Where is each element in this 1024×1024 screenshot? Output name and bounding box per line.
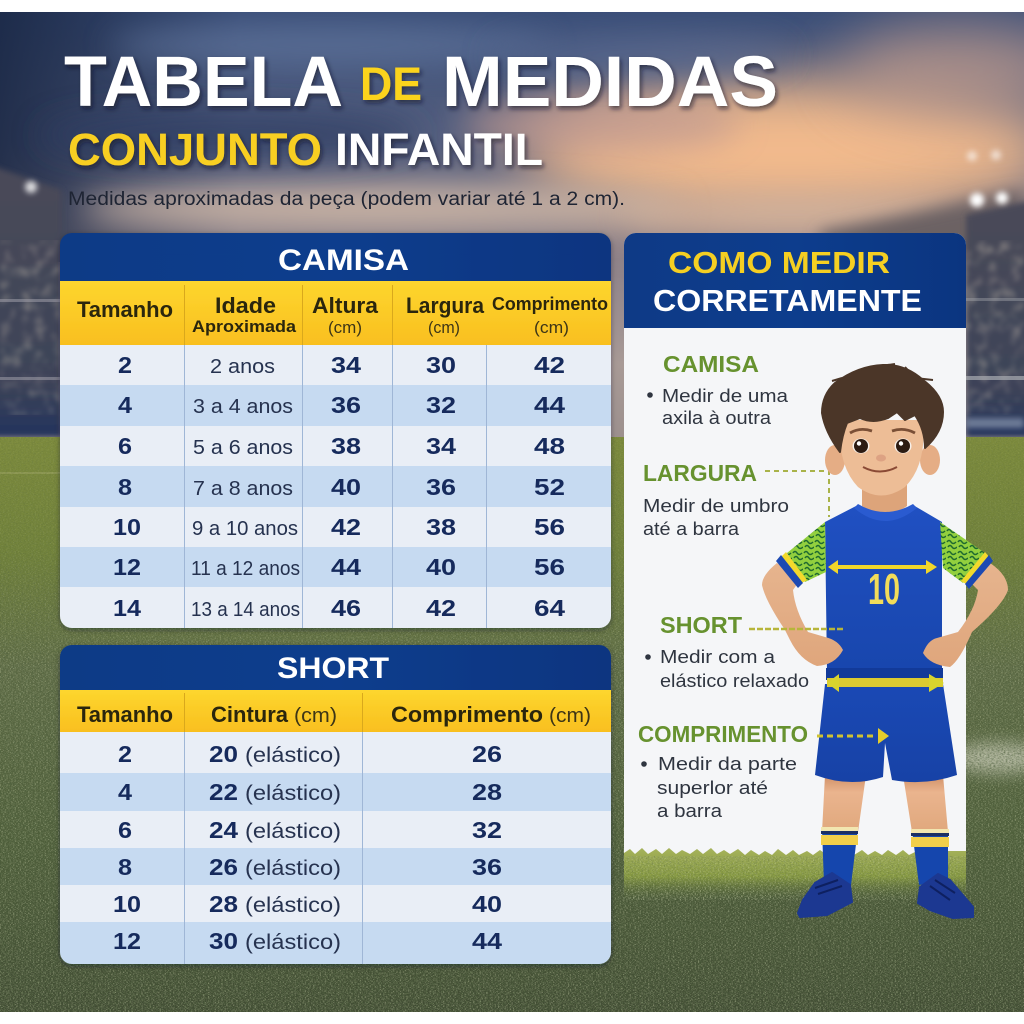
instruction: comprimento: a barra [657,801,723,821]
row: tamanho 14: 64 [534,595,565,621]
row: tamanho 12 [113,928,502,954]
row: tamanho 10: 10 [113,514,141,540]
row: tamanho 12 [113,554,565,580]
row: tamanho 14 [113,595,565,621]
row: tamanho 8: 40 [331,474,361,500]
instruction: comprimento: Medir da parte [658,754,797,774]
subtitle: conjunto infantil: INFANTIL [335,124,543,175]
row: tamanho 6: 38 [331,433,361,459]
row: tamanho 10: 40 [472,891,502,917]
row: tamanho 12: 40 [426,554,456,580]
length arrow [817,728,889,744]
instruction: camisa: CAMISA [663,351,759,377]
row: tamanho 4: 3 a 4 anos [193,396,293,418]
row: tamanho 8: 52 [534,474,565,500]
column headers: Comprimento [391,702,543,727]
waist arrow [827,674,944,692]
row: tamanho 14: 46 [331,595,361,621]
column headers: Aproximada [192,317,297,336]
column headers: (cm) [428,318,460,337]
row: tamanho 8: 36 [472,854,502,880]
row: tamanho 8 [118,474,565,500]
shorts [815,684,957,782]
row: tamanho 12: (elástico) [245,931,341,954]
illustration: boy in kit [749,364,1008,918]
instruction: comprimento [638,721,808,821]
row: tamanho 2 [118,352,565,378]
instruction: short: Medir com a [660,647,776,667]
shirt number: 10 [868,565,900,614]
short pointer [749,628,843,630]
legs [822,775,948,832]
row: tamanho 12: 11 a 12 anos [191,558,300,580]
note: Medidas aproximadas da peça (podem variar até 1 a 2 cm). [68,189,625,210]
row: tamanho 2: 20 [209,741,238,767]
row: tamanho 6: 32 [472,817,502,843]
row: tamanho 4: 4 [118,392,132,418]
row: tamanho 10: 10 [113,891,141,917]
subtitle: conjunto infantil [68,124,543,175]
row: tamanho 6: 48 [534,433,565,459]
column headers [77,702,591,727]
row: tamanho 8: 7 a 8 anos [193,478,293,500]
row: tamanho 4 [118,392,565,418]
column headers: Largura [406,293,485,318]
panel: camisa table [60,233,611,628]
row: tamanho 6 [118,817,502,843]
row: tamanho 4: 28 [472,779,502,805]
subtitle: conjunto infantil: CONJUNTO [68,124,322,175]
eyes and brows [850,429,915,454]
row: tamanho 4: 22 [209,779,238,805]
instruction: camisa: Medir de uma [662,386,789,406]
instruction: largura [643,460,829,539]
row: tamanho 2: (elástico) [245,744,341,767]
row: tamanho 10 [113,891,502,917]
row: tamanho 14: 13 a 14 anos [191,599,300,621]
row: tamanho 12: 44 [472,928,502,954]
instruction: short [645,612,809,691]
instruction: camisa [647,351,789,428]
heading: camisa: CAMISA [278,244,409,277]
hair [822,365,943,452]
row: tamanho 6: 6 [118,433,132,459]
row: tamanho 12: 44 [331,554,361,580]
row: tamanho 8: 8 [118,474,132,500]
row: tamanho 8: 36 [426,474,456,500]
title: DE [360,57,422,110]
column headers: Comprimento [492,294,608,314]
row: tamanho 12: 30 [209,928,238,954]
row: tamanho 4: (elástico) [245,782,341,805]
instruction: largura: Medir de umbro [643,496,789,516]
row: tamanho 4: 44 [534,392,565,418]
instruction: short: SHORT [660,612,742,638]
heading: como medir: COMO MEDIR [668,245,890,280]
row: tamanho 2: 2 [118,352,132,378]
row: tamanho 2: 2 anos [210,356,275,378]
nose and smile [863,454,897,472]
row: tamanho 12: 56 [534,554,565,580]
row: tamanho 4: 32 [426,392,456,418]
instruction: camisa: axila à outra [662,408,772,428]
shirt [825,505,942,672]
heading: corretamente: CORRETAMENTE [653,283,922,318]
instruction: largura: até a barra [643,519,740,539]
column headers: (cm) [328,318,362,337]
row: tamanho 10: 56 [534,514,565,540]
row: tamanho 6: 34 [426,433,456,459]
column headers [77,293,608,337]
row: tamanho 4: 36 [331,392,361,418]
title: MEDIDAS [442,43,778,122]
column headers: Tamanho [77,297,173,322]
row: tamanho 2 [118,741,502,767]
column headers: Idade [215,293,276,318]
row: tamanho 10: 28 [209,891,238,917]
arms [762,563,1008,667]
title [64,43,778,122]
row: tamanho 2: 30 [426,352,456,378]
row: tamanho 8: 26 [209,854,238,880]
row: tamanho 12: 12 [113,928,141,954]
column headers: (cm) [549,705,591,727]
ears [825,445,940,475]
column headers: Tamanho [77,702,173,727]
hair tufts [832,364,933,381]
row: tamanho 10: 9 a 10 anos [192,518,298,540]
column headers: (cm) [294,705,337,727]
row: tamanho 10: 38 [426,514,456,540]
row: tamanho 2: 42 [534,352,565,378]
heading: short: SHORT [277,652,389,685]
panel: como medir corretamente [624,233,966,900]
title: TABELA [64,43,343,122]
row: tamanho 10: (elástico) [245,894,341,917]
instruction: comprimento: COMPRIMENTO [638,721,808,747]
panel: short table [60,645,611,964]
column headers: Altura [312,293,379,318]
row: tamanho 6: 5 a 6 anos [193,437,293,459]
socks [821,827,949,885]
neck [862,485,907,514]
chest arrow [828,560,937,574]
row: tamanho 6: 24 [209,817,238,843]
row: tamanho 14: 14 [113,595,141,621]
row: tamanho 8 [118,854,502,880]
row: tamanho 14: 42 [426,595,456,621]
row: tamanho 2: 26 [472,741,502,767]
row: tamanho 6: 6 [118,817,132,843]
sleeves [776,522,993,589]
face [840,420,924,496]
collar [854,504,917,521]
instruction: comprimento: superlor até [657,778,768,798]
row: tamanho 6 [118,433,565,459]
instruction: short: elástico relaxado [660,671,809,691]
row: tamanho 10 [113,514,565,540]
row: tamanho 6: (elástico) [245,820,341,843]
row: tamanho 2: 34 [331,352,361,378]
row: tamanho 4: 4 [118,779,132,805]
row: tamanho 10: 42 [331,514,361,540]
waistband [826,668,943,680]
column headers: (cm) [534,318,569,337]
row: tamanho 12: 12 [113,554,141,580]
column headers: Cintura [211,702,289,727]
instruction: largura: LARGURA [643,460,757,486]
row: tamanho 2: 2 [118,741,132,767]
shoes [798,873,973,918]
row: tamanho 4 [118,779,502,805]
row: tamanho 8: 8 [118,854,132,880]
row: tamanho 8: (elástico) [245,857,341,880]
